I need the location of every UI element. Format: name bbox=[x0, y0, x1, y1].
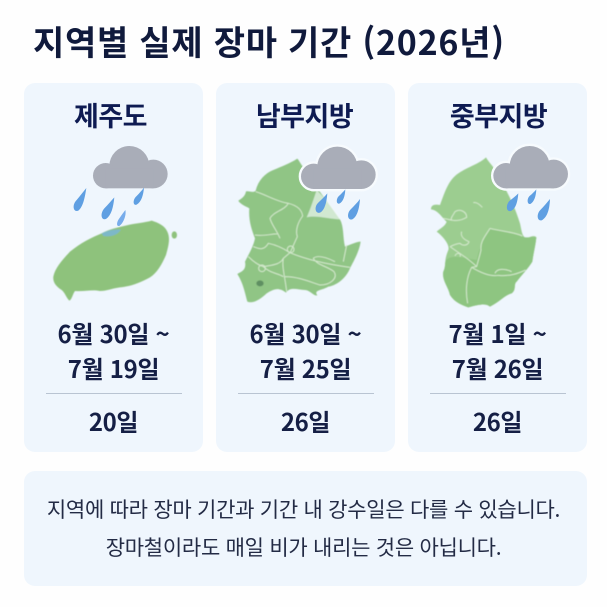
dates: 중부지방 bbox=[448, 315, 547, 385]
icon: rain cloud over 남부지방 bbox=[301, 147, 376, 219]
icon: rain cloud over 제주도 bbox=[74, 146, 168, 226]
dates: 중부지방: 7월 1일 ~ bbox=[448, 315, 547, 350]
panel: 제주도 bbox=[24, 83, 203, 452]
panel: 남부지방 bbox=[216, 83, 395, 452]
duration: 남부지방: 26일 bbox=[281, 403, 330, 438]
dates: 남부지방: 6월 30일 ~ bbox=[250, 315, 361, 350]
dates: 제주도: 6월 30일 ~ bbox=[58, 315, 169, 350]
heading: 중부지방: 중부지방 bbox=[450, 95, 547, 134]
note text: 지역에 따라 장마 기간과 기간 내 강수일은 다를 수 있습니다. bbox=[47, 494, 560, 524]
title: 지역별 실제 장마 기간 (2026년) bbox=[33, 16, 505, 65]
map: 남부지방 bbox=[237, 159, 361, 302]
duration: 제주도: 20일 bbox=[89, 403, 138, 438]
note panel bbox=[24, 471, 587, 586]
dates: 중부지방: 7월 26일 bbox=[452, 350, 543, 385]
dates: 남부지방: 7월 25일 bbox=[260, 350, 351, 385]
heading: 남부지방: 남부지방 bbox=[256, 95, 353, 134]
dates: 남부지방 bbox=[250, 315, 361, 385]
panel: 중부지방 bbox=[408, 83, 587, 452]
dates: 제주도 bbox=[58, 315, 169, 385]
duration: 중부지방: 26일 bbox=[473, 403, 522, 438]
dates: 제주도: 7월 19일 bbox=[68, 350, 159, 385]
heading: 제주도: 제주도 bbox=[74, 95, 147, 134]
icon: rain cloud over 중부지방 bbox=[493, 146, 568, 220]
map: 제주도 bbox=[53, 221, 177, 301]
note text: 장마철이라도 매일 비가 내리는 것은 아닙니다. bbox=[106, 532, 501, 562]
note text bbox=[47, 494, 560, 562]
map: 중부지방 bbox=[431, 157, 536, 307]
